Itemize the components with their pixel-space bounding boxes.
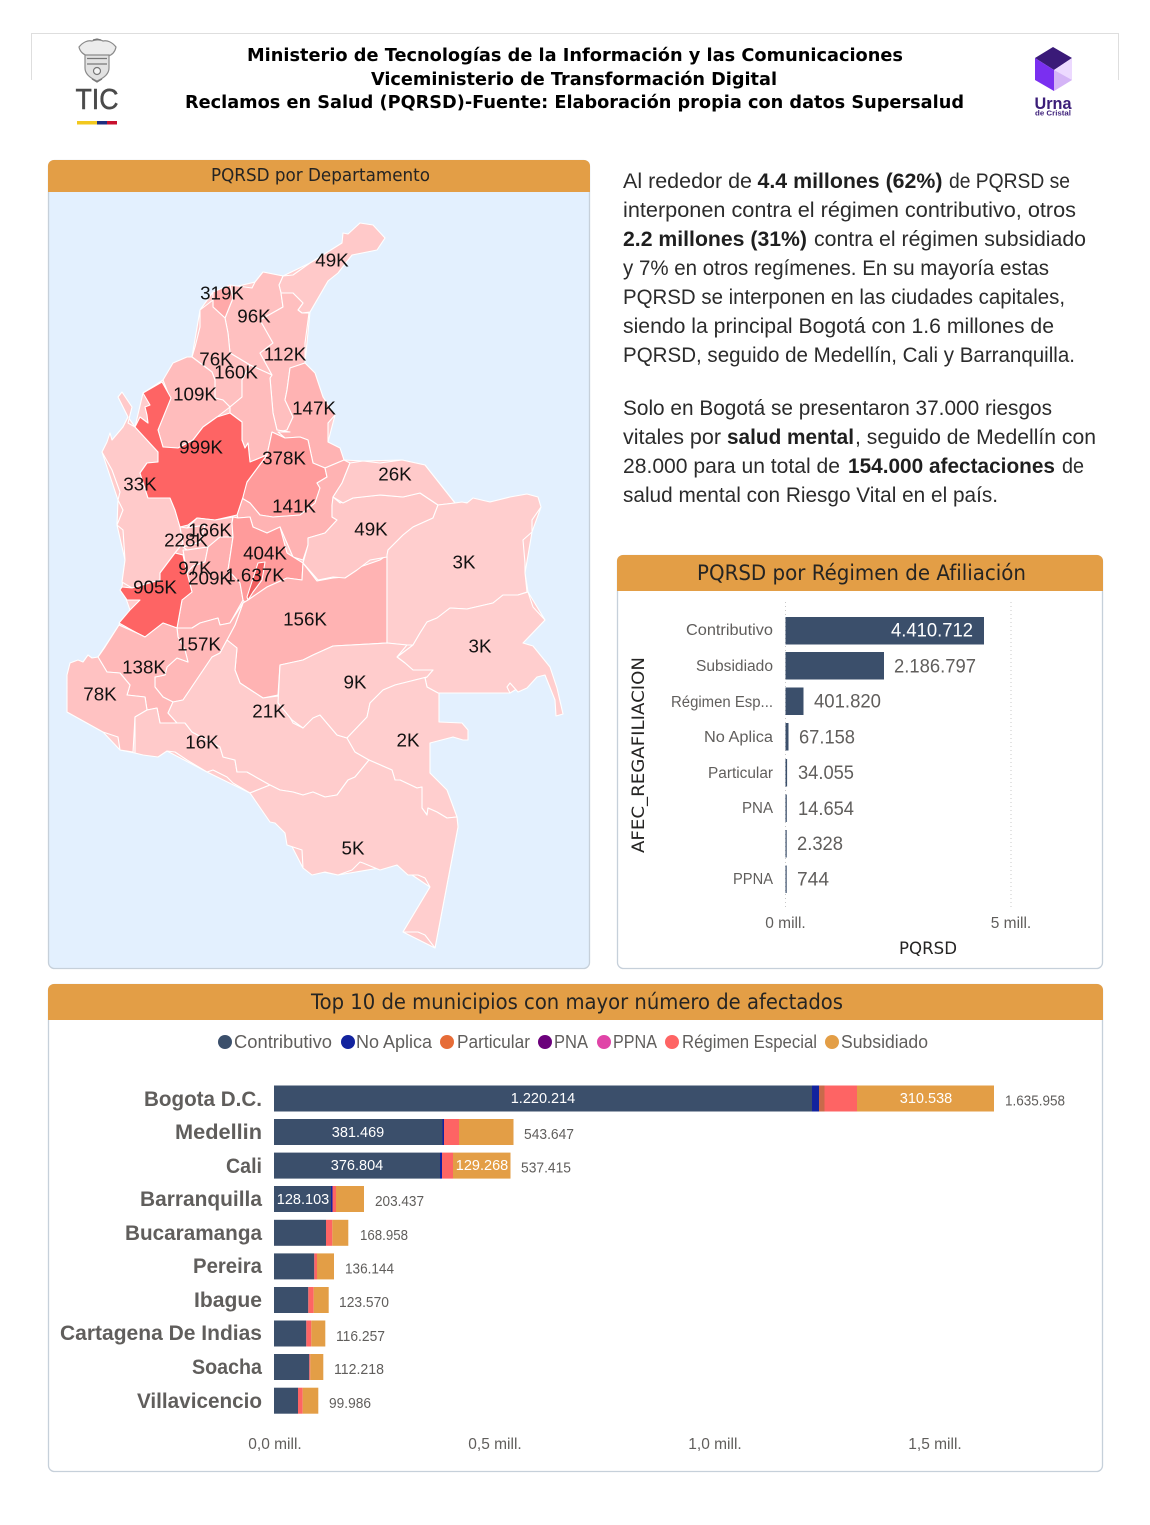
logo: Urna de Cristal: de Cristal [1035, 110, 1071, 118]
bar totals [329, 1094, 1065, 1412]
panel heading: PQRSD por Departamento [211, 165, 430, 186]
title: Ministerio de Tecnologías de la Información y las Comunicaciones [247, 46, 903, 66]
bar: Soacha [274, 1354, 323, 1380]
bar: Barranquilla [274, 1186, 364, 1212]
map value labels: 112K [264, 344, 307, 364]
map value labels: 21K [252, 700, 286, 722]
panel heading: PQRSD por Régimen de Afiliación [697, 561, 1026, 585]
bar: Bogota: 310.538 [900, 1091, 952, 1107]
text block: salud mental: vitales por [623, 425, 721, 449]
city labels: Cartagena De Indias [60, 1322, 262, 1345]
map value labels: 5K [342, 838, 365, 858]
bar totals: 543.647 [524, 1127, 574, 1143]
title: Reclamos en Salud (PQRSD)-Fuente: Elaboración propia con datos Supersalud [185, 93, 964, 113]
panel: PQRSD por Departamento [48, 160, 590, 968]
axis labels [765, 915, 1031, 932]
bar chart: régimen: 67.158 [799, 728, 855, 748]
map value labels: 96K [237, 306, 271, 326]
city labels: Soacha [192, 1356, 262, 1379]
panel: PQRSD por Régimen de Afiliación [617, 555, 1103, 968]
map value labels: 49K [354, 518, 388, 540]
city labels: Cali [226, 1155, 262, 1178]
text block: régimen summary: siendo la principal Bogotá con 1.6 millones de [623, 314, 1054, 338]
city labels: Pereira [193, 1255, 262, 1278]
map value labels: 1.637K [225, 564, 285, 586]
bar chart: régimen: Subsidiado [696, 658, 773, 675]
legend: No Aplica [356, 1032, 433, 1052]
bar chart: régimen: 2.186.797 [894, 656, 976, 678]
map value labels: 209K [188, 568, 232, 588]
city labels: Ibague [194, 1289, 262, 1312]
bar totals: 203.437 [375, 1194, 424, 1210]
axis title: PQRSD: PQRSD [899, 939, 957, 959]
text block: régimen summary: interponen contra el régimen contributivo, otros [623, 198, 1076, 222]
city labels: Medellin [175, 1121, 262, 1144]
map value labels: 404K [243, 542, 287, 564]
bar totals: 168.958 [360, 1228, 408, 1244]
bar chart: régimen: Contributivo [686, 622, 773, 639]
panel heading: Top 10 de municipios con mayor número de afectados [310, 990, 843, 1014]
map value labels: 33K [123, 474, 157, 494]
city labels: Villavicencio [137, 1390, 262, 1413]
text block: régimen summary: PQRSD, seguido de Medellín, Cali y Barranquilla. [623, 343, 1075, 367]
map value labels [83, 250, 492, 858]
panel heading [48, 984, 1103, 1020]
legend: Particular [457, 1032, 530, 1052]
icon: coat of arms [79, 39, 116, 82]
map value labels: 147K [292, 398, 336, 418]
x axis labels: 0,5 mill. [468, 1436, 522, 1453]
text block: régimen summary: contra el régimen subsidiado [814, 227, 1086, 251]
bar: Cali: 129.268 [456, 1158, 508, 1174]
bar: Medellin: 381.469 [332, 1125, 384, 1141]
bar: Pereira [274, 1253, 334, 1279]
bar totals: 116.257 [336, 1329, 385, 1345]
panel: Top 10 de municipios [48, 984, 1103, 1472]
text block: salud mental: salud mental [727, 425, 854, 449]
bar chart: régimen: 744 [797, 870, 829, 890]
map value labels: 378K [262, 448, 306, 468]
text block: régimen summary: PQRSD se interponen en las ciudades capitales, [623, 285, 1065, 309]
bar chart: régimen: PNA [742, 800, 774, 817]
bar totals: 123.570 [339, 1295, 389, 1311]
bar totals: 99.986 [329, 1396, 371, 1412]
map value labels: 319K [200, 282, 244, 304]
map value labels: 26K [378, 464, 412, 484]
axis labels: 0 mill. [765, 915, 806, 932]
text block: régimen summary: 4.4 millones (62%) [758, 169, 942, 193]
bar: Cali [274, 1153, 510, 1179]
axis labels: 5 mill. [991, 915, 1031, 932]
flag bar [77, 121, 117, 124]
text block: salud mental: , seguido de Medellín con [855, 425, 1096, 449]
bar: Medellin [274, 1119, 514, 1145]
legend: Subsidiado [841, 1032, 928, 1052]
logo: TIC ministry [76, 39, 118, 124]
map value labels: 157K [177, 634, 221, 654]
map value labels: 999K [179, 436, 223, 458]
map value labels: 49K [315, 250, 349, 270]
icon: cube [1035, 47, 1072, 91]
text block: salud mental: 28.000 para un total de [623, 454, 840, 478]
bar: Bogota [274, 1086, 994, 1112]
bar: Barranquilla: 128.103 [277, 1192, 329, 1208]
legend [218, 1032, 928, 1052]
bar chart: régimen: 34.055 [798, 763, 854, 784]
bar chart: régimen: Particular [708, 765, 773, 782]
bar totals: 537.415 [521, 1160, 571, 1176]
map value labels: 905K [133, 576, 177, 598]
bar totals: 112.218 [334, 1362, 384, 1378]
map value labels: 138K [122, 656, 166, 678]
bar chart: régimen: 401.820 [814, 692, 881, 712]
bar: Villavicencio [274, 1388, 318, 1414]
map value labels: 228K [164, 530, 208, 550]
title [185, 46, 964, 113]
bar chart: régimen: 4.410.712 [891, 620, 973, 642]
bar: Cartagena [274, 1320, 325, 1346]
text block: régimen summary: y 7% en otros regímenes. En su mayoría estas [623, 256, 1049, 280]
text block: salud mental [623, 396, 1096, 507]
bar: Bogota: 1.220.214 [511, 1091, 575, 1107]
bar chart: régimen [671, 617, 984, 893]
text block: régimen summary [623, 169, 1086, 367]
text block: régimen summary: Al rededor de [623, 169, 752, 193]
bar chart: régimen: Régimen Esp... [671, 694, 773, 711]
text block: salud mental: 154.000 afectaciones [848, 454, 1055, 478]
title: Viceministerio de Transformación Digital [371, 70, 777, 90]
legend: Contributivo [234, 1032, 332, 1052]
bar: Bucaramanga [274, 1220, 348, 1246]
bar chart: régimen: 2.328 [797, 834, 843, 855]
bar totals: 136.144 [345, 1262, 394, 1278]
legend: Régimen Especial [682, 1032, 817, 1052]
map value labels: 3K [469, 636, 492, 656]
text block: régimen summary: de PQRSD se [949, 169, 1070, 193]
map value labels: 109K [173, 384, 217, 404]
text block: salud mental: salud mental con Riesgo Vital en el país. [623, 483, 998, 507]
text block: salud mental: Solo en Bogotá se presentaron 37.000 riesgos [623, 396, 1052, 420]
logo: Urna de Cristal [1034, 47, 1072, 118]
legend: PNA [554, 1032, 588, 1052]
x axis labels [248, 1436, 962, 1453]
map value labels: 9K [344, 672, 367, 692]
map value labels: 141K [272, 496, 316, 516]
text block: régimen summary: 2.2 millones (31%) [623, 227, 807, 251]
TIC wordmark: TIC [76, 84, 118, 116]
map value labels: 78K [83, 684, 117, 704]
map value labels: 76K [199, 348, 233, 370]
bar: Ibague [274, 1287, 329, 1313]
city labels: Bucaramanga [125, 1222, 262, 1245]
map value labels: 3K [453, 552, 476, 572]
bar totals: 1.635.958 [1005, 1094, 1065, 1110]
axis title: AFEC_REGAFILIACION: AFEC_REGAFILIACION [629, 657, 649, 853]
legend: PPNA [613, 1032, 657, 1052]
map: Colombia departments [67, 223, 563, 948]
city labels: Barranquilla [140, 1188, 262, 1211]
bar chart: régimen: No Aplica [704, 729, 773, 746]
map value labels: 16K [185, 732, 219, 752]
text block: salud mental: de [1062, 454, 1084, 478]
map value labels: 166K [188, 520, 232, 540]
city labels: Bogota D.C. [144, 1088, 262, 1111]
map value labels: 2K [397, 730, 420, 750]
map value labels: 97K [178, 558, 212, 578]
bar chart: régimen: PPNA [733, 871, 774, 888]
x axis labels: 0,0 mill. [248, 1436, 302, 1453]
Urna wordmark: Urna [1034, 95, 1072, 113]
stacked bar chart: municipios [274, 1086, 994, 1414]
panel heading [617, 555, 1103, 591]
map value labels: 156K [283, 608, 327, 630]
bar: Cali: 376.804 [331, 1158, 383, 1174]
x axis labels: 1,5 mill. [908, 1436, 962, 1453]
bar chart: régimen: 14.654 [798, 799, 854, 820]
map value labels: 160K [214, 362, 258, 382]
panel heading [48, 160, 590, 192]
x axis labels: 1,0 mill. [688, 1436, 742, 1453]
gridlines [786, 602, 1011, 908]
city labels [60, 1088, 262, 1413]
